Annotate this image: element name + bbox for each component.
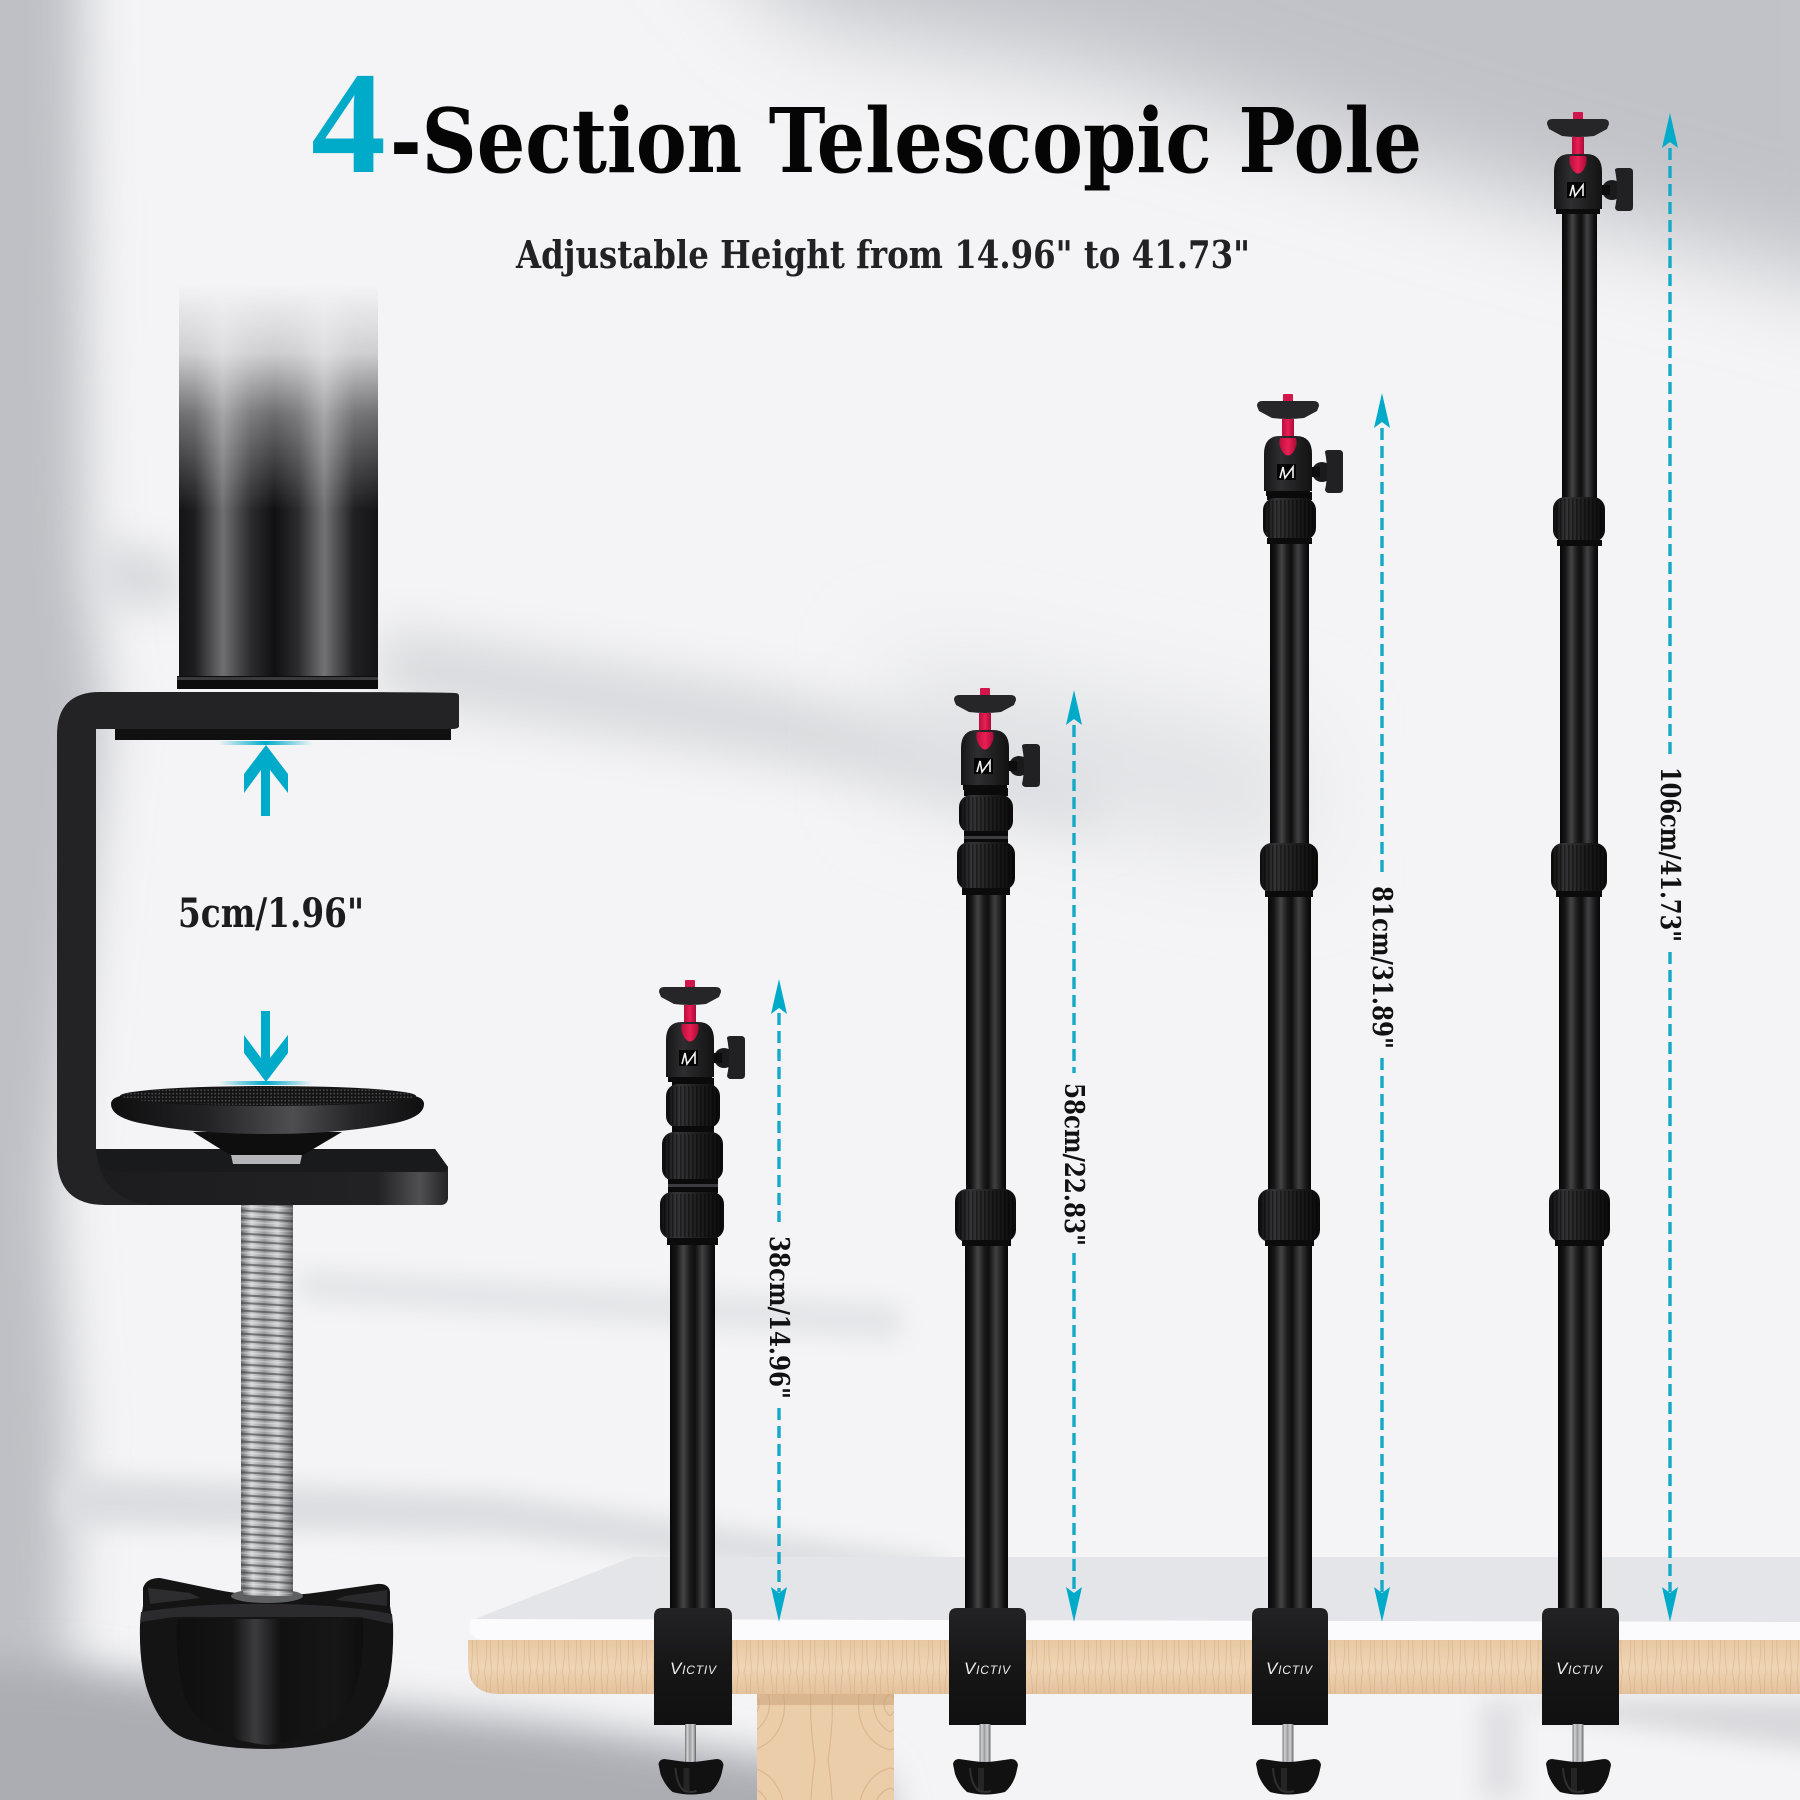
- pole tube: [1558, 205, 1602, 1612]
- knurled collars: [1549, 497, 1610, 1246]
- dimension arrow 106cm: 106cm/41.73": [1654, 767, 1685, 942]
- pole tube: [965, 890, 1008, 1612]
- C-clamp frame: [57, 692, 459, 1205]
- dimension arrow 58cm: [1058, 690, 1089, 1622]
- clamp knob: [1256, 1724, 1321, 1794]
- dimension arrow 38cm: [763, 979, 794, 1622]
- clamp knob: [1546, 1724, 1611, 1794]
- threaded screw: [241, 1200, 293, 1600]
- dimension arrow 81cm: 81cm/31.89": [1366, 886, 1397, 1049]
- pole at 106cm: [1542, 112, 1633, 1794]
- ball head: [1547, 112, 1633, 214]
- desk clamp: VICTIV: [670, 1659, 717, 1678]
- pressure disc: [111, 1086, 424, 1164]
- title: [311, 42, 1422, 204]
- desk clamp: VICTIV: [1556, 1659, 1603, 1678]
- wing knob: [140, 1570, 393, 1749]
- dimension arrow 38cm: 38cm/14.96": [763, 1236, 794, 1399]
- arrow down to disc: [218, 1011, 313, 1085]
- desk clamp: [949, 1608, 1026, 1725]
- arrow up to top jaw: [218, 741, 313, 816]
- desk clamp: VICTIV: [1266, 1659, 1313, 1678]
- clearance label: 5cm/1.96": [178, 890, 364, 937]
- title: 4: [311, 42, 386, 204]
- dimension arrow 81cm: [1366, 393, 1397, 1622]
- knurled collars: [955, 788, 1016, 1246]
- wooden leg: [757, 1694, 894, 1800]
- large pole fading upward: [179, 300, 378, 676]
- desk clamp: VICTIV: [964, 1659, 1011, 1678]
- dimension arrow 58cm: 58cm/22.83": [1058, 1083, 1089, 1246]
- pole at 38cm: [654, 980, 745, 1794]
- knurled collars: [1258, 492, 1320, 1246]
- pole at 81cm: [1252, 394, 1343, 1794]
- desk clamp: [654, 1608, 732, 1725]
- knurled collars: [660, 1078, 724, 1245]
- ball head: [954, 688, 1040, 790]
- pole tube: [1268, 538, 1312, 1612]
- dimension arrow 106cm: [1654, 113, 1685, 1622]
- clamp knob: [658, 1724, 724, 1794]
- title: -Section Telescopic Pole: [390, 88, 1422, 193]
- desk clamp: [1542, 1608, 1619, 1725]
- subtitle: Adjustable Height from 14.96" to 41.73": [515, 232, 1250, 277]
- clamp knob: [953, 1724, 1018, 1794]
- large clamp detail: [57, 260, 459, 1749]
- desk clamp: [1252, 1608, 1328, 1725]
- pole tube: [670, 1240, 715, 1612]
- pole at 58cm: [949, 688, 1040, 1794]
- ball head: [1257, 394, 1343, 496]
- desk with white top and wood edge: [468, 1557, 1800, 1800]
- ball head: [659, 980, 745, 1082]
